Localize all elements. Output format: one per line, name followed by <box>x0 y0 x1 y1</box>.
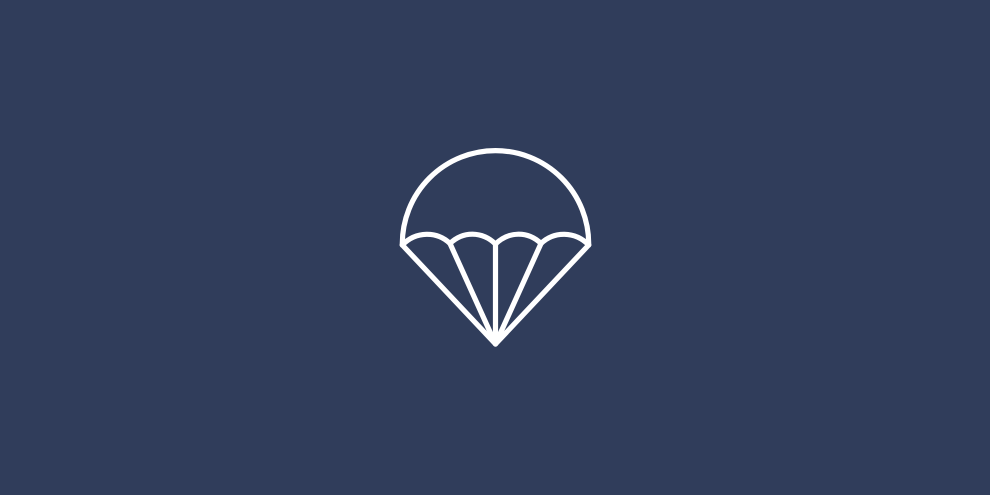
icon: parachute <box>402 151 589 344</box>
